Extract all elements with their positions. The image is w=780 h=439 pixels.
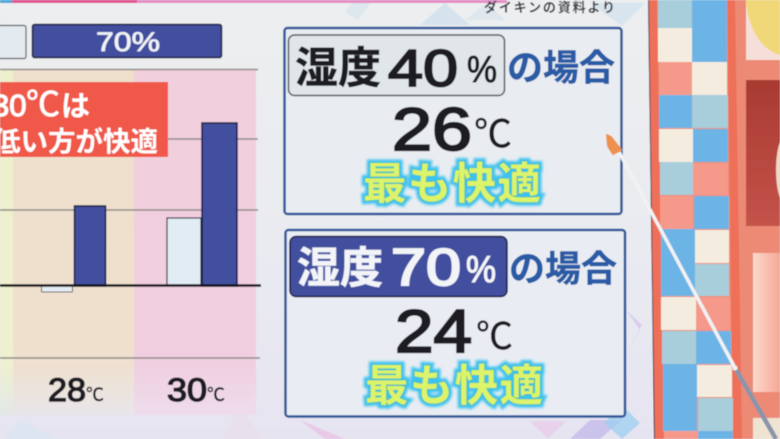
value: 26C: 26	[392, 96, 472, 163]
value: 26C	[392, 96, 512, 163]
comfort label: 最も快適	[365, 351, 543, 414]
heading suffix: の場合	[507, 39, 615, 91]
baseline axis	[0, 284, 261, 287]
value: 24C: 24	[395, 298, 472, 365]
heading: humidity 40 percent badge	[288, 34, 504, 98]
temperature band: 30C	[134, 70, 256, 415]
heading: humidity 70 percent badge	[290, 234, 507, 297]
callout: 30C note: ℃	[26, 77, 60, 126]
heading: humidity 40 percent badge: 湿度	[295, 34, 381, 96]
temperature band: 26C edge	[0, 70, 13, 415]
studio wall: red frame	[648, 0, 780, 439]
label: 28C: 28	[48, 372, 86, 408]
panel: humidity 70 percent	[286, 230, 625, 416]
heading: humidity 70 percent badge: 70	[391, 239, 461, 297]
comfort label: 最も快適	[363, 149, 541, 212]
studio set: pink window	[753, 253, 780, 392]
callout: 30C note: は	[61, 83, 90, 125]
value: 24C	[395, 298, 513, 365]
panel: humidity 40 percent	[284, 28, 622, 214]
heading: humidity 40 percent badge: 40	[388, 40, 458, 98]
grid lines	[0, 70, 260, 358]
value: 24C: ℃	[476, 306, 513, 360]
label: 28C: ℃	[86, 381, 104, 407]
studio wall: mosaic tiles	[658, 0, 733, 439]
label: 30C: 30	[167, 372, 207, 408]
temperature band: 28C	[13, 70, 134, 415]
studio set: dark red panel	[746, 80, 780, 226]
comfort label: 最も快適	[365, 351, 543, 414]
pointer stick	[607, 135, 776, 439]
label: 30C	[167, 372, 225, 408]
callout: 30C note	[0, 77, 168, 159]
top colour strip	[0, 0, 507, 3]
legend: humidity 70 percent: 70%	[96, 27, 160, 57]
bar: 30C humidity 70 percent	[202, 123, 237, 286]
studio set: top window with yellow circle	[746, 0, 780, 60]
comfort label: 最も快適	[363, 149, 541, 212]
legend: humidity 70 percent	[32, 24, 222, 58]
studio set: lower cream panel	[753, 418, 780, 439]
heading: humidity 70 percent badge: %	[466, 249, 496, 290]
label: 30C: ℃	[207, 381, 225, 407]
legend: humidity 40 percent (cropped)	[0, 26, 26, 58]
value: 26C: ℃	[474, 103, 512, 158]
heading suffix: の場合	[509, 240, 617, 292]
bar: 28C humidity 40 percent (negative)	[42, 285, 72, 292]
bar: 28C humidity 70 percent	[74, 206, 106, 286]
heading: humidity 70 percent badge: 湿度	[297, 234, 383, 296]
heading: humidity 40 percent badge: %	[467, 49, 497, 90]
bar: 30C humidity 40 percent	[167, 218, 201, 285]
chart: humidity bars by temperature	[0, 70, 261, 415]
label: 28C	[48, 372, 104, 408]
pointer tip	[607, 135, 621, 154]
